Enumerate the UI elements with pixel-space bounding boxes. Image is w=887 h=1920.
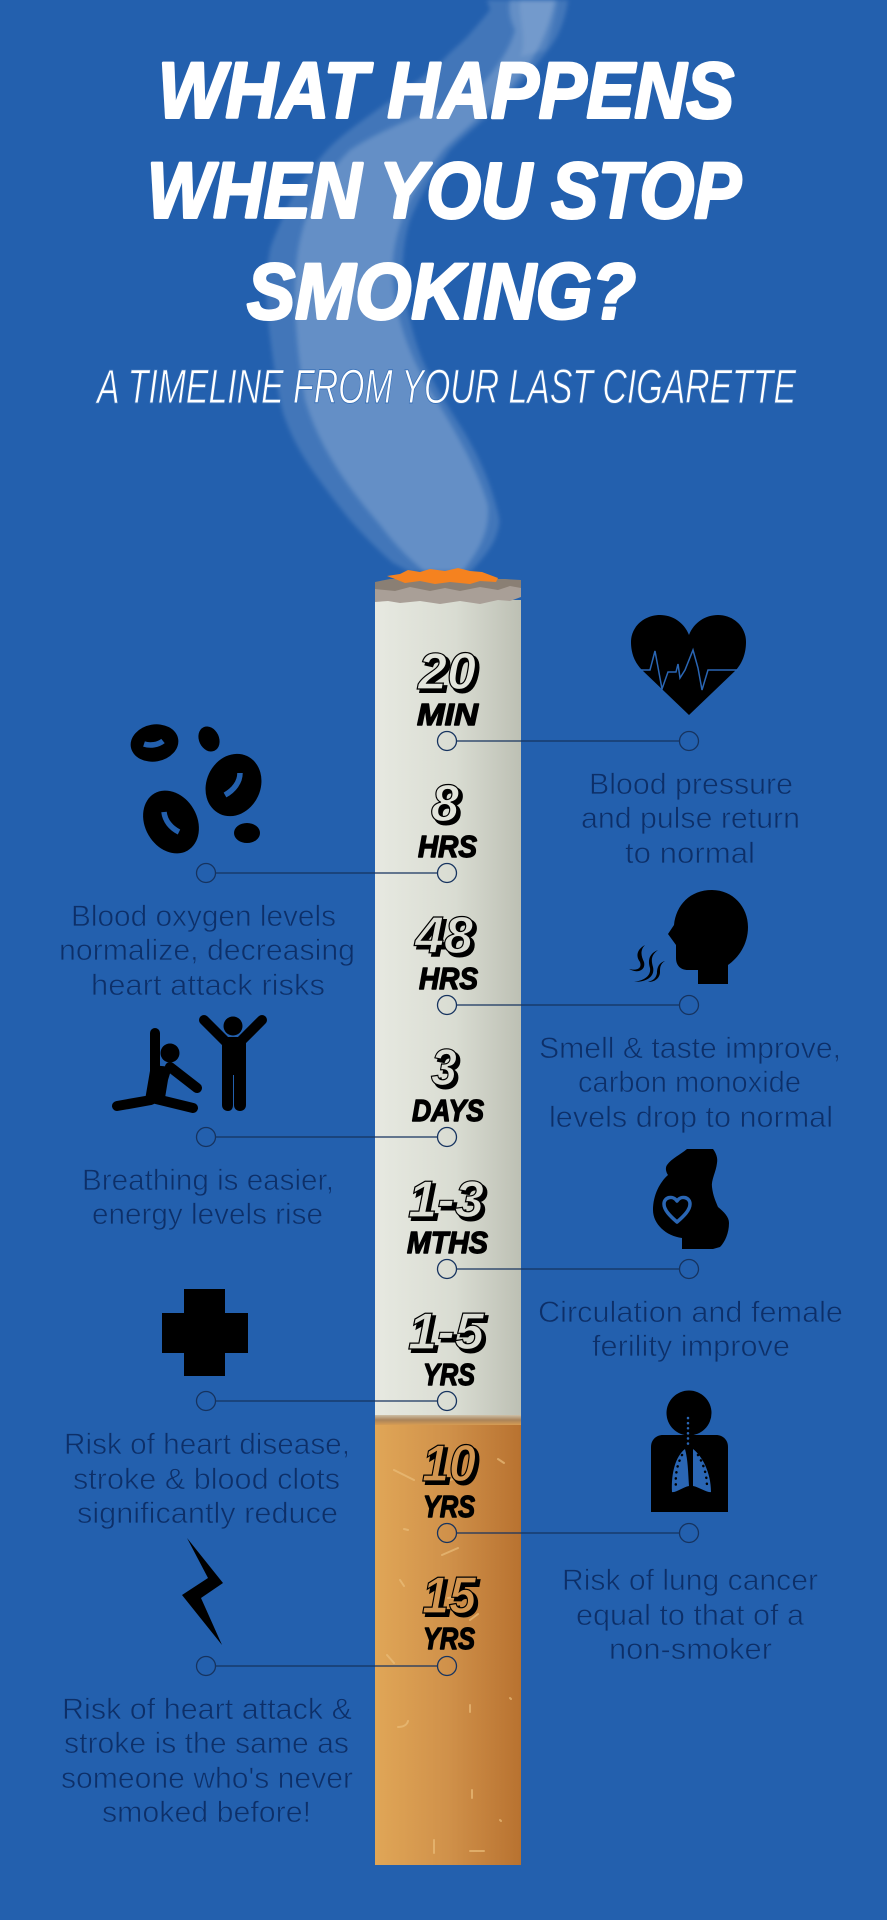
smoke xyxy=(266,0,568,572)
label: 1-3 MTHS: 1-3 xyxy=(408,1171,484,1229)
connector xyxy=(438,1260,698,1278)
label: 1-3 MTHS: MTHS xyxy=(407,1225,488,1260)
text: smoked before! xyxy=(102,1796,311,1829)
label: 3 DAYS: 3 xyxy=(431,1039,457,1097)
text xyxy=(59,900,355,1002)
text: someone who's never xyxy=(61,1762,353,1795)
text xyxy=(538,1296,843,1363)
text: stroke is the same as xyxy=(64,1727,349,1760)
text: Risk of lung cancer xyxy=(562,1564,818,1597)
text: and pulse return xyxy=(581,802,800,835)
label: 15 YRS: 15 xyxy=(425,1570,480,1628)
connector xyxy=(438,996,698,1014)
label: 8 HRS: HRS xyxy=(418,829,477,864)
paper to filter band xyxy=(375,1415,521,1425)
label: 3 DAYS: 3 xyxy=(434,1042,460,1100)
label: 1-5 YRS xyxy=(408,1303,488,1392)
label: 48 HRS: HRS xyxy=(419,961,478,996)
label: 3 DAYS: DAYS xyxy=(412,1093,484,1128)
text: Breathing is easier, xyxy=(82,1164,334,1197)
timeline item: 3 days xyxy=(82,1016,484,1231)
connector xyxy=(196,864,456,882)
text: significantly reduce xyxy=(77,1497,338,1530)
text: carbon monoxide xyxy=(578,1066,801,1099)
timeline item: 1-5 years xyxy=(64,1289,488,1530)
timeline item: 10 years xyxy=(422,1390,818,1666)
text: to normal xyxy=(625,837,755,870)
text: equal to that of a xyxy=(576,1599,805,1632)
icon: heart with pulse xyxy=(631,615,746,715)
ash xyxy=(375,584,521,604)
connector xyxy=(196,1656,456,1676)
icon: lightning bolt xyxy=(182,1538,223,1645)
text: Blood pressure xyxy=(589,768,793,801)
text xyxy=(61,1693,353,1829)
text: Blood oxygen levels xyxy=(71,900,336,933)
text xyxy=(539,1032,841,1134)
icon: blood cells xyxy=(128,721,271,864)
label: 8 HRS: 8 xyxy=(434,778,462,836)
timeline item: 8 hrs xyxy=(59,721,477,1002)
label: 10 YRS xyxy=(422,1435,479,1524)
label: 1-5 YRS: YRS xyxy=(423,1357,475,1392)
title xyxy=(147,46,741,336)
text: ferility improve xyxy=(592,1330,790,1363)
filter flecks xyxy=(387,1459,511,1853)
connector xyxy=(438,732,698,750)
cigarette xyxy=(375,568,521,1865)
icon: lungs in torso xyxy=(651,1390,728,1512)
ember xyxy=(387,568,498,584)
label: 10 YRS: 10 xyxy=(422,1435,476,1493)
connector xyxy=(438,1524,698,1542)
label: 8 HRS: 8 xyxy=(431,775,459,833)
timeline item: 15 years xyxy=(61,1538,480,1829)
text: Risk of heart disease, xyxy=(64,1428,350,1461)
text: levels drop to normal xyxy=(549,1101,833,1134)
label: 3 DAYS xyxy=(412,1039,484,1128)
text xyxy=(562,1564,818,1666)
text xyxy=(64,1428,350,1530)
icon: head smelling xyxy=(629,890,748,984)
label: 15 YRS xyxy=(422,1567,480,1656)
label: 8 HRS xyxy=(418,775,477,864)
label: 1-3 MTHS xyxy=(407,1171,488,1260)
label: 20 MIN: MIN xyxy=(417,697,479,732)
timeline item: 1-3 months xyxy=(407,1149,843,1363)
cigarette filter xyxy=(375,1416,521,1865)
label: 15 YRS: YRS xyxy=(423,1621,475,1656)
label: 20 MIN: 20 xyxy=(417,643,476,701)
connector xyxy=(196,1128,456,1146)
label: 20 MIN xyxy=(417,643,479,732)
text: Circulation and female xyxy=(538,1296,843,1329)
timeline item: 48 hrs xyxy=(414,890,841,1134)
timeline item: 20 min xyxy=(417,615,800,870)
text: non-smoker xyxy=(609,1633,772,1666)
icon: medical cross xyxy=(162,1289,248,1376)
text xyxy=(82,1164,334,1231)
label: 1-5 YRS: 1-5 xyxy=(411,1306,488,1364)
text: Risk of heart attack & xyxy=(62,1693,352,1726)
label: 1-3 MTHS: 1-3 xyxy=(411,1174,487,1232)
text: Smell & taste improve, xyxy=(539,1032,841,1065)
title: WHEN YOU STOP xyxy=(147,146,741,234)
title: WHAT HAPPENS xyxy=(158,46,734,134)
label: 48 HRS: 48 xyxy=(417,910,476,968)
connector xyxy=(196,1392,456,1410)
text: stroke & blood clots xyxy=(73,1463,340,1496)
text: energy levels rise xyxy=(92,1198,323,1231)
label: 1-5 YRS: 1-5 xyxy=(408,1303,485,1361)
text xyxy=(581,768,800,870)
icon: active people xyxy=(117,1016,262,1111)
cigarette paper xyxy=(375,600,521,1416)
text: normalize, decreasing xyxy=(59,934,355,967)
icon: pregnant woman xyxy=(653,1149,729,1249)
label: 20 MIN: 20 xyxy=(420,646,479,704)
label: 10 YRS: 10 xyxy=(425,1438,479,1496)
label: 48 HRS xyxy=(414,907,478,996)
label: 48 HRS: 48 xyxy=(414,907,473,965)
text: heart attack risks xyxy=(91,969,325,1002)
label: 10 YRS: YRS xyxy=(423,1489,475,1524)
title: SMOKING? xyxy=(247,246,636,336)
label: 15 YRS: 15 xyxy=(422,1567,477,1625)
